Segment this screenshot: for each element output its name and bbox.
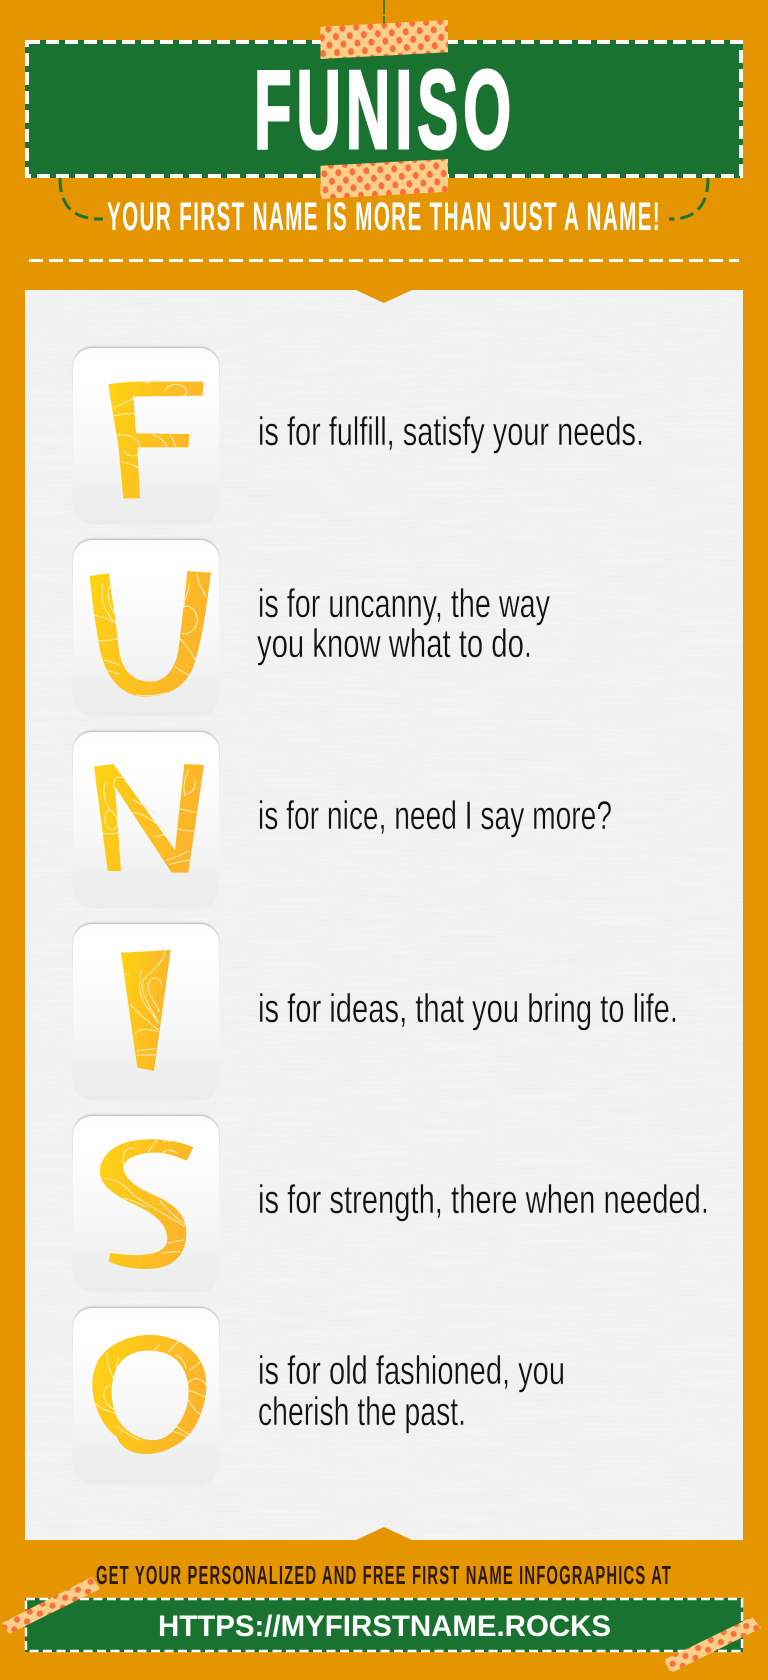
notch: top <box>356 290 412 303</box>
notch: bottom <box>356 1527 412 1540</box>
tape: bottom of banner <box>320 159 448 199</box>
letter S <box>100 1139 193 1269</box>
letter O <box>92 1335 207 1454</box>
url banner <box>25 1598 743 1652</box>
row I <box>73 922 678 1100</box>
card S <box>73 1114 219 1292</box>
tape: top <box>320 20 448 59</box>
text U: is for uncanny, the way <box>258 582 550 626</box>
row S <box>73 1114 709 1292</box>
text U: you know what to do. <box>257 622 532 666</box>
dashed divider <box>29 259 739 262</box>
text O <box>258 1349 565 1434</box>
panel: letters <box>25 290 743 1540</box>
text O: is for old fashioned, you <box>258 1349 565 1393</box>
row O <box>73 1306 565 1484</box>
title banner <box>25 40 743 178</box>
text U <box>257 582 550 666</box>
letter F <box>108 380 203 498</box>
card U <box>73 538 219 716</box>
dashed bracket: right <box>669 178 708 219</box>
card I <box>73 922 219 1100</box>
card N <box>73 730 219 908</box>
row U <box>73 538 550 716</box>
title: FUNISO <box>254 48 516 172</box>
text O: cherish the past. <box>258 1390 466 1434</box>
letter N <box>94 764 204 873</box>
url: HTTPS://MYFIRSTNAME.ROCKS <box>158 1610 611 1643</box>
letter U <box>89 571 211 697</box>
text N: is for nice, need I say more? <box>258 794 612 838</box>
letter I <box>121 950 171 1071</box>
card F <box>73 346 219 524</box>
row N <box>73 730 612 908</box>
row F <box>73 346 644 524</box>
tape: bottom right <box>664 1617 761 1673</box>
tape: bottom left <box>2 1577 100 1634</box>
dashed bracket: left <box>60 178 103 219</box>
card O <box>73 1306 219 1484</box>
hanging string <box>383 0 385 24</box>
